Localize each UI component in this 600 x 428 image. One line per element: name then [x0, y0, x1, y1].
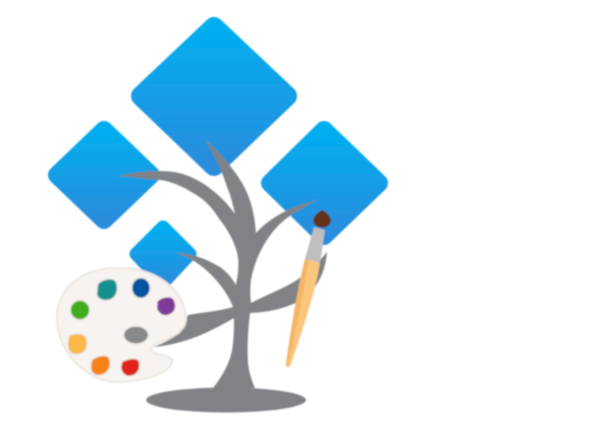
tree base — [146, 388, 306, 412]
icon: tree — [118, 139, 327, 412]
diamond: right — [270, 130, 379, 236]
brush handle — [286, 259, 320, 367]
tree trunk and branches — [118, 139, 327, 388]
diamond: top large — [141, 27, 287, 166]
brush ferrule — [305, 227, 325, 263]
paint: purple — [157, 297, 175, 315]
palette thumb hole — [124, 326, 148, 344]
diamond: left — [57, 130, 151, 220]
paint: green — [70, 300, 90, 320]
icon: palette — [57, 268, 186, 382]
paint: teal — [97, 279, 117, 300]
brush bristles — [313, 210, 331, 228]
paint: yellow — [68, 334, 87, 354]
diamond: small — [136, 227, 190, 283]
paint: blue — [132, 278, 150, 298]
paint: orange — [91, 356, 110, 375]
icon: paintbrush — [286, 210, 331, 367]
palette board — [57, 268, 186, 382]
brush handle shadow — [286, 259, 309, 366]
paint: red — [121, 359, 140, 376]
